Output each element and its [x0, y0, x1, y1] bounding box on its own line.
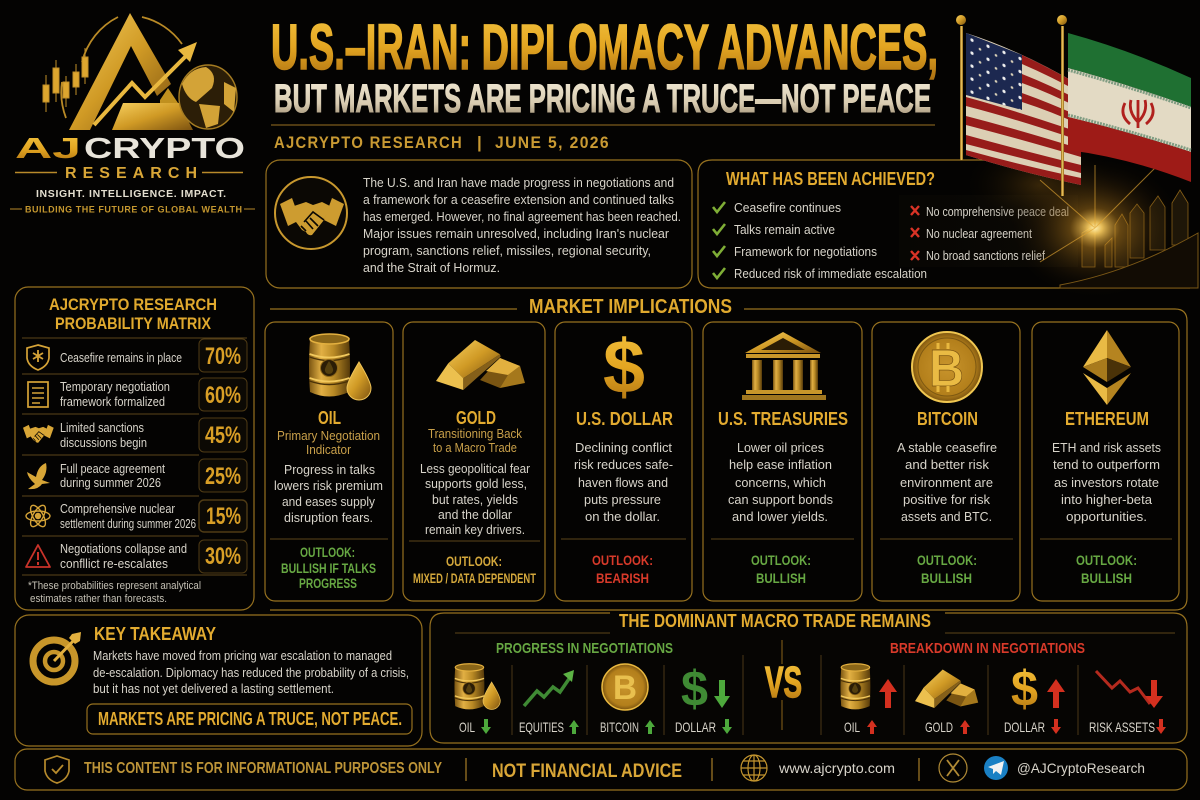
achieved list: Framework for negotiations: [734, 244, 877, 259]
row: peace: during summer 2026: [60, 476, 161, 490]
icon: bitcoin coin: [912, 332, 982, 402]
card: oil: Primary Negotiation: [277, 428, 380, 443]
row: framework: 60%: [205, 382, 241, 409]
website: www.ajcrypto.com: [778, 760, 895, 776]
card: bitcoin: [872, 322, 1020, 601]
card: us treasuries: OUTLOOK:: [751, 552, 811, 568]
not achieved list: [899, 195, 1078, 267]
card: us dollar: on the dollar.: [585, 509, 660, 524]
not achieved list: No comprehensive peace deal: [926, 204, 1069, 219]
row: ceasefire: Ceasefire remains in place: [60, 351, 182, 365]
title: [271, 11, 938, 121]
card: bitcoin: positive for risk: [903, 492, 990, 507]
card: us dollar: risk reduces safe-: [574, 457, 673, 472]
dollar down: DOLLAR: [675, 719, 716, 735]
card: gold: Less geopolitical fear: [420, 461, 531, 476]
equities up: EQUITIES: [519, 719, 564, 735]
takeaway text: Markets have moved from pricing war escalation to managed: [93, 648, 392, 663]
card: gold: [403, 322, 545, 601]
row: collapse: 30%: [205, 543, 241, 570]
row: sanctions: [23, 418, 247, 452]
oil down: [454, 664, 500, 735]
panel: market implications: [265, 296, 1187, 610]
card: bitcoin: BITCOIN: [917, 409, 978, 429]
logo wordmark: CRYPTO: [84, 133, 245, 165]
card: ethereum: ETHEREUM: [1065, 409, 1149, 429]
versus: [765, 640, 802, 730]
card: gold: remain key drivers.: [425, 522, 525, 537]
row: framework: framework formalized: [60, 395, 165, 409]
row: collapse: Negotiations collapse and: [60, 542, 187, 556]
takeaway text: de-escalation. Diplomacy has reduced the probability of a crisis,: [93, 665, 409, 680]
summary text: program, sanctions relief, missiles, regional security,: [363, 243, 651, 258]
card: gold: Transitioning Back: [428, 426, 522, 441]
heading: WHAT HAS BEEN ACHIEVED?: [726, 169, 935, 189]
handle: @AJCryptoResearch: [1017, 760, 1145, 776]
icon: dollar sign: $: [603, 325, 645, 410]
panel: key takeaway: [15, 615, 422, 746]
gold up: GOLD: [925, 719, 953, 735]
card: ethereum: into higher-beta: [1061, 492, 1153, 507]
icon: telegram: [984, 756, 1008, 780]
card: us treasuries: Lower oil prices: [737, 440, 824, 455]
not achieved list: No broad sanctions relief: [926, 248, 1045, 263]
card: ethereum: [1032, 322, 1179, 601]
icon: gold bars: [436, 340, 525, 390]
card: oil: OIL: [318, 408, 341, 428]
icon: treasury building: [742, 332, 826, 400]
icon: ethereum diamond: [1083, 330, 1131, 405]
row: nuclear: [26, 500, 247, 532]
card: us dollar: Declining conflict: [575, 440, 672, 455]
card: oil: disruption fears.: [284, 510, 373, 525]
achieved list: Reduced risk of immediate escalation: [734, 266, 927, 281]
card: oil: [265, 322, 393, 601]
icon: x: [939, 754, 967, 782]
card: oil: OUTLOOK:: [300, 544, 355, 560]
dollar down: $: [681, 661, 708, 717]
card: oil: and eases supply: [282, 494, 375, 509]
versus: VS: [765, 658, 802, 707]
card: gold: but rates, yields: [432, 492, 518, 507]
logo: [10, 13, 255, 214]
heading: THE DOMINANT MACRO TRADE REMAINS: [619, 611, 931, 631]
takeaway text: but it has not yet delivered a lasting settlement.: [93, 681, 334, 696]
not financial advice: NOT FINANCIAL ADVICE: [492, 760, 682, 782]
logo wordmark: AJ: [15, 133, 81, 165]
skyline: [1082, 190, 1188, 267]
card: us treasuries: concerns, which: [735, 475, 826, 490]
card: ethereum: OUTLOOK:: [1076, 552, 1137, 568]
row: peace: Full peace agreement: [60, 462, 165, 476]
summary text: Major issues remain unresolved, including Iran's nuclear: [363, 226, 670, 241]
row: peace: 25%: [205, 463, 241, 490]
card: us treasuries: BULLISH: [756, 570, 806, 586]
heading: MARKET IMPLICATIONS: [529, 296, 732, 318]
card: gold: MIXED / DATA DEPENDENT: [413, 570, 536, 586]
card: ethereum: ETH and risk assets: [1052, 440, 1161, 455]
icon: globe: [741, 755, 767, 781]
oil up: [840, 664, 897, 735]
panel: dominant macro trade: [430, 611, 1187, 743]
card: gold: supports gold less,: [425, 476, 527, 491]
row: sanctions: discussions begin: [60, 436, 147, 450]
panel: key takeaway: KEY TAKEAWAY: [94, 624, 216, 644]
summary text: [363, 175, 681, 275]
achieved list: Talks remain active: [734, 222, 835, 237]
breakdown heading: BREAKDOWN IN NEGOTIATIONS: [890, 640, 1085, 657]
oil up: OIL: [844, 719, 860, 735]
row: framework: [28, 378, 247, 411]
matrix heading: AJCRYPTO RESEARCH: [49, 296, 217, 314]
dollar up: [1004, 661, 1065, 735]
card: gold: to a Macro Trade: [433, 440, 517, 455]
logo wordmark: INSIGHT. INTELLIGENCE. IMPACT.: [36, 188, 226, 200]
card: bitcoin: OUTLOOK:: [917, 552, 977, 568]
card: oil: lowers risk premium: [274, 478, 383, 493]
callout: MARKETS ARE PRICING A TRUCE, NOT PEACE.: [98, 709, 402, 729]
matrix heading: [49, 296, 217, 333]
panel: what has been achieved: [698, 160, 1190, 288]
footer: [15, 749, 1187, 790]
card: oil: Progress in talks: [284, 462, 375, 477]
icon: oil barrel: [309, 334, 371, 400]
row: peace: [27, 459, 247, 492]
equities up: [519, 670, 579, 735]
dollar up: $: [1011, 661, 1038, 717]
date line: AJCRYPTO RESEARCH: [274, 133, 463, 152]
achieved list: [713, 200, 927, 281]
disclaimer: THIS CONTENT IS FOR INFORMATIONAL PURPOSES ONLY: [84, 760, 442, 777]
summary text: has emerged. However, no final agreement has been reached.: [363, 209, 681, 224]
summary text: and the Strait of Hormuz.: [363, 260, 500, 275]
icon: bitcoin coin: B: [929, 340, 964, 398]
card: us treasuries: help ease inflation: [729, 457, 832, 472]
logo wordmark: RESEARCH: [65, 165, 197, 182]
card: gold: and the dollar: [438, 507, 513, 522]
logo wordmark: BUILDING THE FUTURE OF GLOBAL WEALTH: [25, 204, 242, 214]
oil down: OIL: [459, 719, 475, 735]
card: us treasuries: and lower yields.: [732, 509, 828, 524]
card: us dollar: OUTLOOK:: [592, 552, 653, 568]
card: ethereum: as investors rotate: [1054, 475, 1159, 490]
takeaway text: [93, 648, 409, 696]
row: nuclear: 15%: [206, 503, 241, 530]
logo wordmark: [10, 133, 255, 214]
callout: [87, 704, 412, 734]
card: us dollar: U.S. DOLLAR: [576, 409, 673, 429]
progress heading: PROGRESS IN NEGOTIATIONS: [496, 640, 673, 657]
card: bitcoin: and better risk: [905, 457, 990, 472]
summary text: a framework for a ceasefire extension and continued talks: [363, 192, 674, 207]
card: bitcoin: environment are: [900, 475, 993, 490]
card: gold: GOLD: [456, 408, 496, 428]
card: oil: BULLISH IF TALKS: [281, 560, 376, 576]
bitcoin up: B: [613, 669, 637, 707]
card: us treasuries: can support bonds: [728, 492, 833, 507]
Iran flag: [1057, 15, 1191, 196]
risk assets down: [1089, 671, 1166, 735]
card: us dollar: puts pressure: [584, 492, 661, 507]
icon: target: [33, 632, 81, 682]
icon: handshake: [275, 177, 347, 249]
row: framework: Temporary negotiation: [60, 380, 170, 394]
footnote: *These probabilities represent analytical: [28, 580, 201, 592]
card: bitcoin: BULLISH: [921, 570, 972, 586]
row: collapse: confllict re-escalates: [60, 557, 168, 571]
not achieved list: No nuclear agreement: [926, 226, 1032, 241]
US flag: [956, 15, 1081, 185]
card: ethereum: BULLISH: [1081, 570, 1132, 586]
row: collapse: [26, 540, 247, 573]
card: gold: OUTLOOK:: [446, 553, 502, 569]
date line: JUNE 5, 2026: [495, 133, 610, 152]
card: us treasuries: [703, 322, 862, 601]
matrix heading: PROBABILITY MATRIX: [55, 315, 211, 333]
panel: probability matrix: [15, 287, 254, 610]
card: us dollar: [555, 322, 692, 601]
dollar up: DOLLAR: [1004, 719, 1045, 735]
risk assets down: RISK ASSETS: [1089, 719, 1155, 735]
card: oil: PROGRESS: [299, 575, 357, 591]
card: ethereum: tend to outperform: [1053, 457, 1160, 472]
card: oil: Indicator: [306, 442, 352, 457]
bitcoin up: [600, 664, 655, 735]
bitcoin up: BITCOIN: [600, 719, 639, 735]
gold up: [915, 670, 978, 735]
row: sanctions: Limited sanctions: [60, 421, 144, 435]
row: ceasefire: 70%: [205, 343, 241, 370]
achieved list: Ceasefire continues: [734, 200, 841, 215]
summary text: The U.S. and Iran have made progress in negotiations and: [363, 175, 674, 190]
row: sanctions: 45%: [205, 422, 241, 449]
icon: shield: [45, 756, 69, 783]
flags and skyline: [956, 15, 1198, 300]
date line: [274, 133, 610, 152]
logo mark: [43, 13, 237, 130]
row: nuclear: settlement during summer 2026: [60, 517, 196, 531]
card: bitcoin: A stable ceasefire: [897, 440, 997, 455]
row: ceasefire: [27, 339, 247, 372]
card: us dollar: BEARISH: [596, 570, 649, 586]
dollar down: [675, 661, 732, 735]
panel: summary: [266, 160, 692, 288]
card: ethereum: opportunities.: [1066, 509, 1147, 524]
card: us dollar: haven flows and: [578, 475, 668, 490]
footnote: [28, 580, 201, 605]
footnote: estimates rather than forecasts.: [30, 593, 167, 605]
date line: |: [477, 133, 483, 152]
card: bitcoin: assets and BTC.: [901, 509, 992, 524]
card: us treasuries: U.S. TREASURIES: [718, 409, 848, 429]
row: nuclear: Comprehensive nuclear: [60, 502, 175, 516]
